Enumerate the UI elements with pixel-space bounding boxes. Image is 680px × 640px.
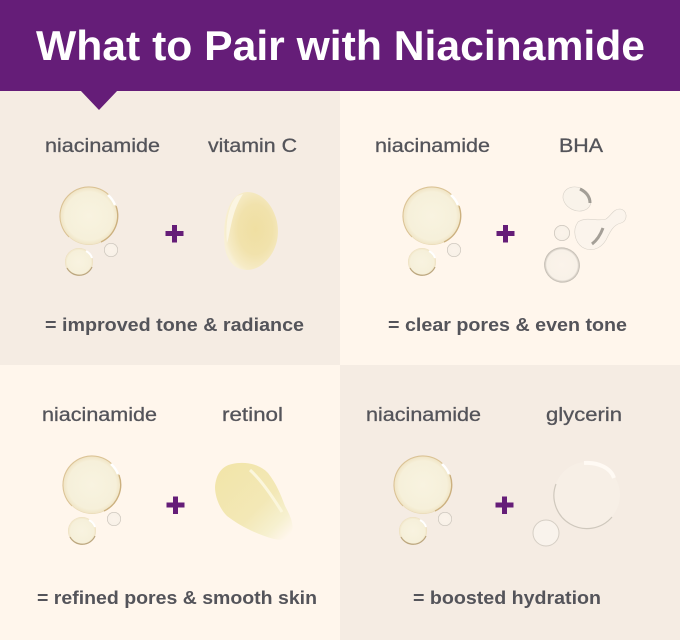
- result text: = refined pores & smooth skin: [37, 588, 317, 608]
- icon: plus: [496, 225, 514, 242]
- notch arrow: [80, 90, 118, 110]
- label: niacinamide: niacinamide: [42, 404, 157, 426]
- title: What to Pair with Niacinamide: [36, 22, 645, 69]
- header banner: [0, 0, 680, 110]
- label: niacinamide: niacinamide: [45, 135, 160, 157]
- icon: niacinamide drops: [63, 456, 121, 545]
- panel: retinol pairing: [0, 365, 340, 640]
- icon: BHA droplets: [538, 182, 626, 289]
- icon: retinol swatch: [215, 463, 293, 540]
- icon: niacinamide drops: [403, 187, 461, 276]
- label: vitamin C: vitamin C: [208, 135, 297, 157]
- icon: plus: [166, 225, 184, 242]
- panel: glycerin pairing: [340, 365, 680, 640]
- label: glycerin: glycerin: [546, 404, 622, 426]
- icon: plus: [166, 496, 184, 514]
- label: niacinamide: niacinamide: [375, 135, 490, 157]
- icon: niacinamide drops: [394, 456, 452, 545]
- icon: plus: [496, 496, 514, 514]
- result text: = improved tone & radiance: [45, 315, 304, 335]
- label: niacinamide: niacinamide: [366, 404, 481, 426]
- label: retinol: retinol: [222, 404, 283, 426]
- result text: = clear pores & even tone: [388, 315, 627, 335]
- panel: BHA pairing: [340, 91, 680, 365]
- result text: = boosted hydration: [413, 588, 601, 608]
- icon: vitamin C swatch: [224, 192, 278, 270]
- icon: glycerin drops: [533, 462, 620, 546]
- label: BHA: BHA: [559, 135, 603, 157]
- panel: vitamin C pairing: [0, 91, 340, 365]
- icon: niacinamide drops: [60, 187, 118, 276]
